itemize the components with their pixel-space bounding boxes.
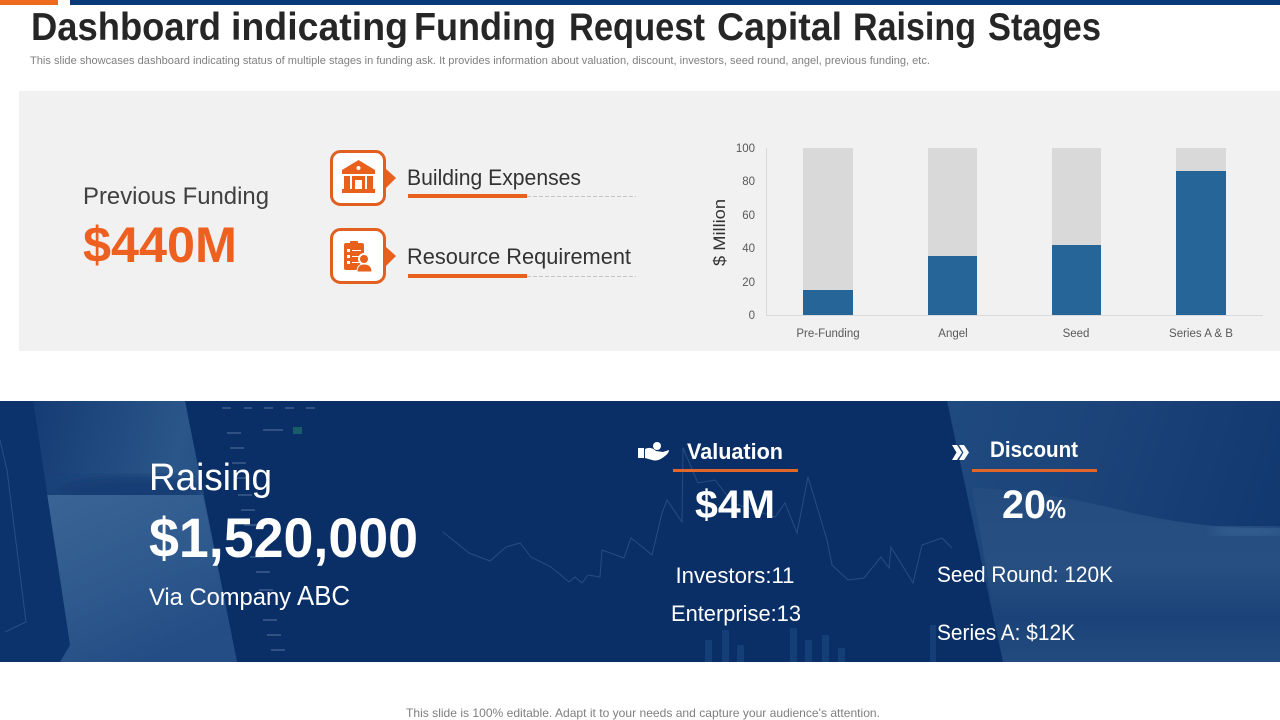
title: Dashboard bbox=[31, 6, 221, 49]
raising block: ABC bbox=[297, 580, 350, 611]
faint axis ticks bbox=[222, 407, 315, 651]
y axis labels: 40 bbox=[742, 243, 755, 255]
x axis labels: Pre-Funding bbox=[796, 328, 860, 340]
y axis labels bbox=[736, 143, 755, 322]
discount block: Series A: $12K bbox=[937, 620, 1075, 645]
previous funding value: $440M bbox=[83, 217, 237, 273]
valuation block: Enterprise:13 bbox=[671, 601, 801, 626]
icon: double chevron bbox=[952, 445, 969, 460]
bar chart bbox=[710, 143, 1263, 340]
discount block: 20 bbox=[1002, 483, 1046, 527]
previous funding label: Previous Funding bbox=[83, 183, 269, 210]
panel: raising band bbox=[0, 401, 1280, 662]
valuation block: Valuation bbox=[687, 439, 783, 464]
raising block bbox=[149, 457, 418, 611]
x axis labels: Seed bbox=[1063, 328, 1089, 340]
y axis labels: 60 bbox=[742, 210, 755, 222]
label: building expenses bbox=[407, 165, 636, 198]
footer note: This slide is 100% editable. Adapt it to your needs and capture your audience's attention. bbox=[406, 706, 880, 720]
icon: building bbox=[332, 152, 396, 204]
bar: Angel bbox=[928, 148, 977, 315]
bar: Seed bbox=[1052, 148, 1101, 315]
faint stock line bbox=[443, 448, 952, 583]
title: Capital bbox=[717, 6, 842, 49]
title: indicating bbox=[231, 6, 408, 49]
x axis labels bbox=[796, 328, 1233, 340]
y axis labels: 80 bbox=[742, 176, 755, 188]
title: Raising bbox=[853, 6, 976, 49]
subtitle: This slide showcases dashboard indicating status of multiple stages in funding ask. It provides information about valuation, discount, investors, seed round, angel, previous funding, etc. bbox=[30, 55, 930, 67]
panel: previous funding and chart bbox=[19, 91, 1280, 351]
y axis title: $ Million bbox=[710, 199, 729, 266]
title bbox=[31, 6, 1101, 49]
x axis labels: Series A & B bbox=[1169, 328, 1233, 340]
discount block: % bbox=[1046, 494, 1066, 524]
y axis labels: 100 bbox=[736, 143, 755, 155]
x axis labels: Angel bbox=[938, 328, 968, 340]
title: Request bbox=[569, 6, 705, 49]
raising block: $1,520,000 bbox=[149, 506, 418, 569]
title: Funding bbox=[414, 6, 556, 49]
valuation block: $4M bbox=[695, 483, 775, 527]
discount block bbox=[937, 437, 1113, 645]
icon: resource clipboard bbox=[332, 230, 396, 282]
raising block: Via Company bbox=[149, 584, 291, 611]
label: resource requirement: Resource Requirement bbox=[407, 244, 631, 269]
valuation block: Investors:11 bbox=[676, 563, 794, 588]
background photo shapes bbox=[0, 401, 1280, 662]
bar: Pre-Funding bbox=[803, 148, 853, 315]
top accent bars bbox=[0, 0, 1280, 5]
faint volume bars bbox=[705, 625, 936, 662]
discount block: Discount bbox=[990, 437, 1079, 462]
y axis labels: 20 bbox=[742, 277, 755, 289]
title: Stages bbox=[988, 6, 1101, 49]
bar: Series A & B bbox=[1176, 148, 1226, 315]
discount block: Seed Round: 120K bbox=[937, 562, 1113, 587]
y axis labels: 0 bbox=[749, 310, 755, 322]
label: building expenses: Building Expenses bbox=[407, 165, 581, 190]
valuation block bbox=[671, 439, 801, 626]
raising block: Raising bbox=[149, 457, 272, 499]
icon: hand with coin bbox=[638, 442, 669, 460]
